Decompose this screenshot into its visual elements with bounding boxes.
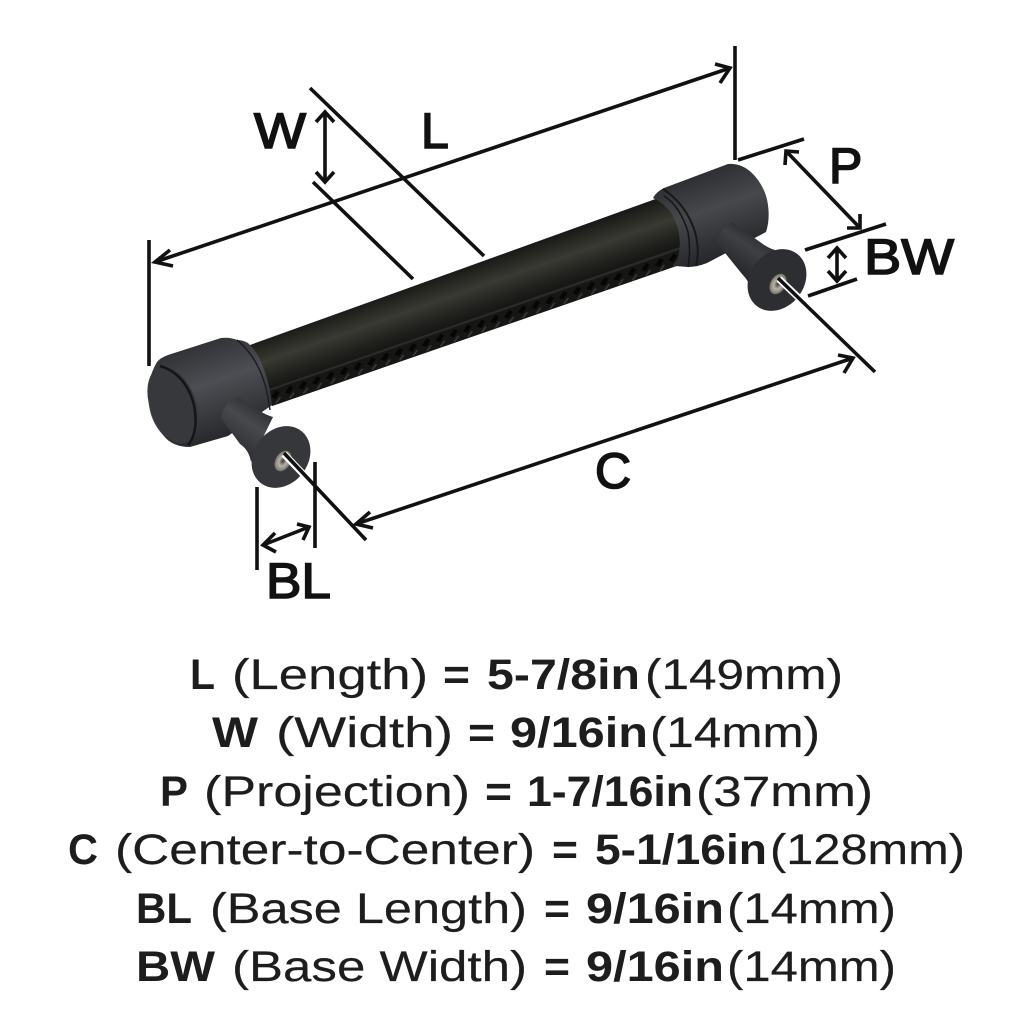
right post <box>717 222 775 292</box>
dimension BW: base width <box>808 248 857 296</box>
spec line: center-to-center: (Center-to-Center) <box>115 826 535 874</box>
spec line: projection: 1-7/16in <box>527 768 693 816</box>
spec line: base width: = <box>544 943 570 991</box>
spec line: base length: = <box>544 885 570 933</box>
spec line: length <box>190 651 843 699</box>
spec line: base width: 9/16in <box>586 943 724 991</box>
leather bar <box>250 183 720 406</box>
label BW: BW <box>864 229 955 285</box>
spec line: center-to-center: = <box>552 826 578 874</box>
dimension BL: base length <box>257 462 315 570</box>
left nut <box>271 448 295 474</box>
spec line: width: (Width) <box>276 709 453 757</box>
spec line: width: = <box>468 709 495 757</box>
right nut <box>766 271 790 297</box>
spec line: base length: BL <box>136 885 192 933</box>
product: cabinet pull handle <box>138 164 819 500</box>
stitched seam <box>266 240 705 406</box>
spec line: projection: (37mm) <box>696 768 873 816</box>
spec line: base width: (14mm) <box>727 943 896 991</box>
right end cap <box>653 164 769 267</box>
spec line: center-to-center <box>68 826 965 874</box>
label C: C <box>595 443 631 499</box>
spec line: length: 5-7/8in <box>487 651 640 699</box>
left post <box>221 397 273 462</box>
left cap end face <box>138 360 208 450</box>
dimension P: projection <box>738 139 886 250</box>
spec line: center-to-center: 5-1/16in <box>595 826 767 874</box>
left end cap <box>148 338 272 447</box>
label BL: BL <box>266 553 331 609</box>
spec line: width: (14mm) <box>650 709 820 757</box>
label P: P <box>829 138 862 194</box>
label W: W <box>254 103 307 159</box>
spec line: base width: BW <box>136 943 215 991</box>
spec line: center-to-center: (128mm) <box>770 826 965 874</box>
spec line: length: (149mm) <box>645 651 843 699</box>
spec line: projection: P <box>160 768 188 816</box>
spec line: width <box>212 709 820 757</box>
dimension L: length <box>149 46 735 366</box>
label L: L <box>421 103 449 159</box>
spec line: base length: 9/16in <box>586 885 724 933</box>
spec line: base length: (Base Length) <box>210 885 527 933</box>
spec line: width: W <box>212 709 258 757</box>
spec line: projection: (Projection) <box>204 768 470 816</box>
spec line: base length: (14mm) <box>727 885 896 933</box>
spec line: projection <box>160 768 873 816</box>
spec line: center-to-center: C <box>68 826 98 874</box>
dimension C: center-to-center <box>284 278 875 540</box>
dimension W: width <box>310 88 484 279</box>
spec line: length: (Length) <box>232 651 428 699</box>
spec line: base width <box>136 943 896 991</box>
spec line: width: 9/16in <box>510 709 648 757</box>
spec line: base width: (Base Width) <box>232 943 527 991</box>
spec line: length: L <box>190 651 215 699</box>
spec line: length: = <box>443 651 470 699</box>
spec line: base length <box>136 885 896 933</box>
spec line: projection: = <box>485 768 512 816</box>
right base flange <box>735 237 819 323</box>
left base flange <box>239 414 323 500</box>
